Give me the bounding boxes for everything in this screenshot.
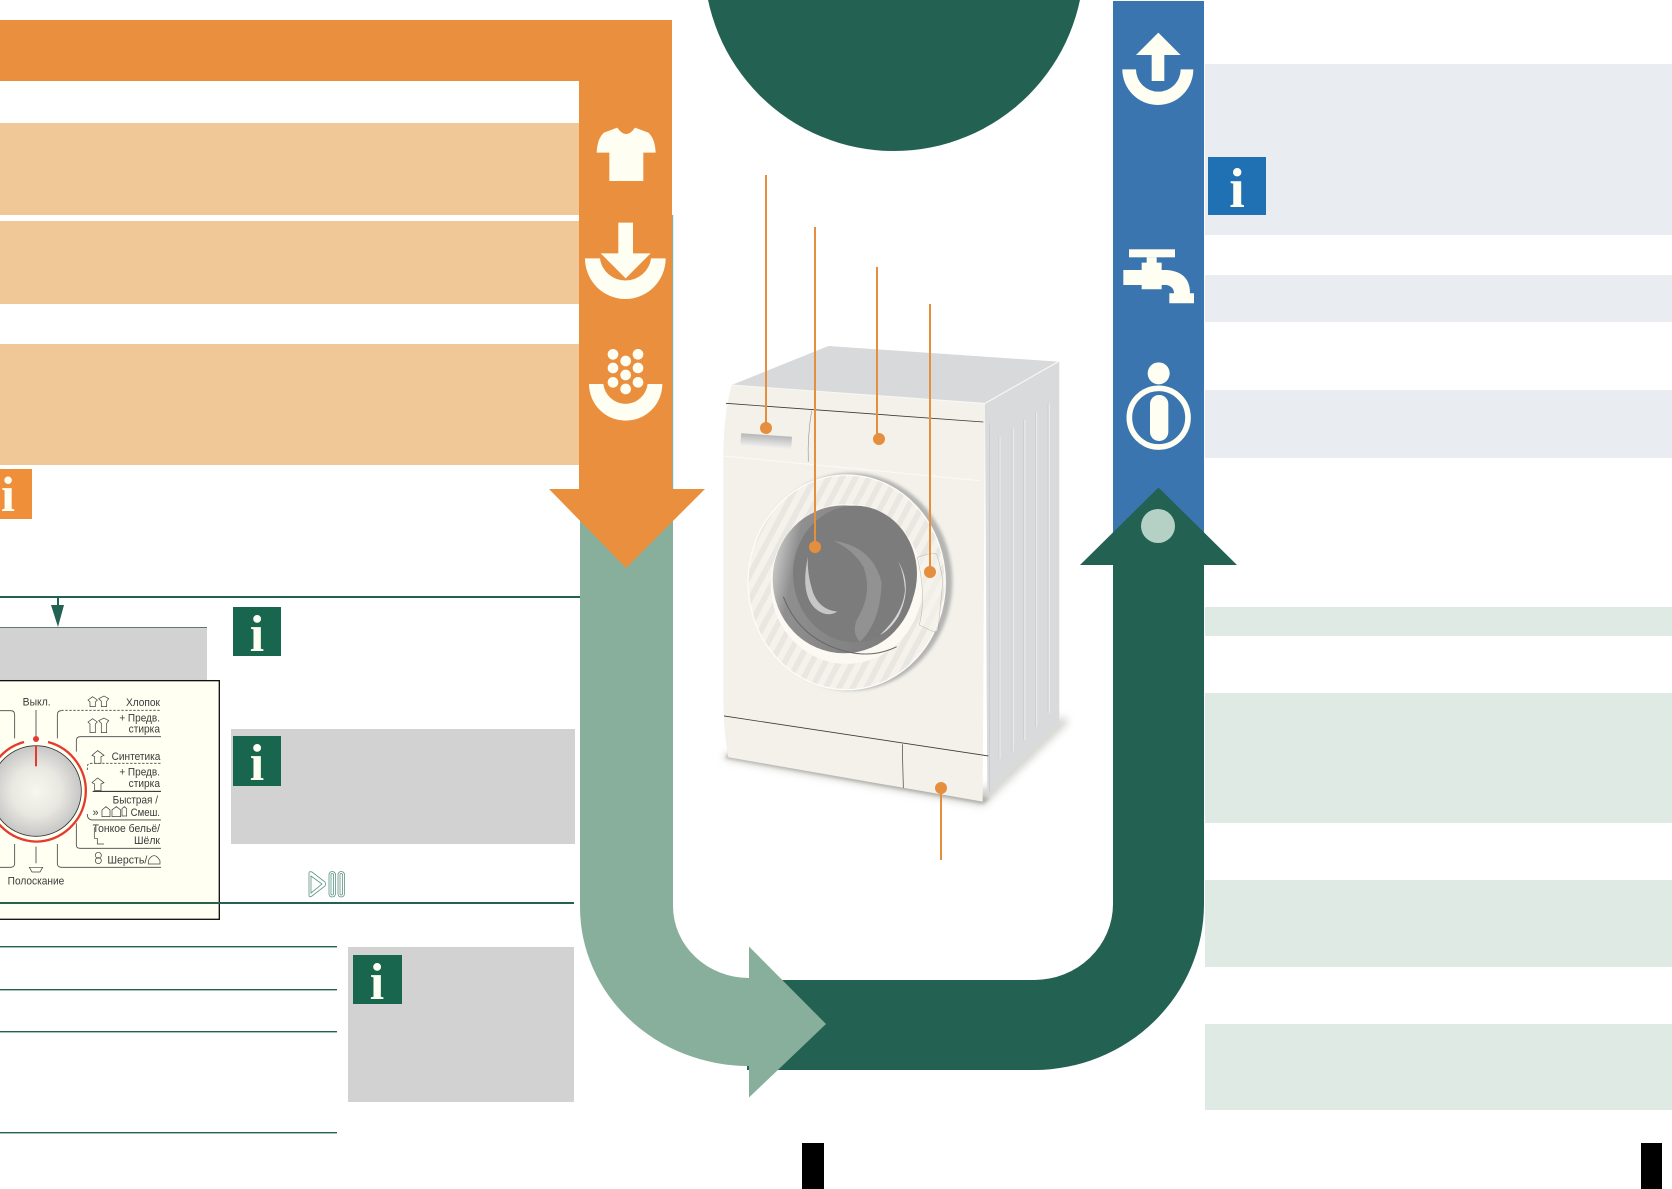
arrow: sage right arrowhead [749, 946, 826, 1098]
panel: control dial [0, 681, 219, 919]
panel: control dial: стирка [129, 724, 161, 736]
icon: information person [1129, 362, 1188, 447]
panels: green steps [1205, 607, 1672, 1110]
panel: control dial: Смеш. [131, 807, 160, 819]
panel: control dial: Тонкое бельё/ [93, 823, 161, 835]
washing machine illustration [723, 346, 1068, 805]
icon: blue info box: i [1229, 158, 1245, 220]
panel: control dial: Шёлк [134, 835, 160, 847]
panel: control dial: Выкл. [23, 696, 51, 708]
flow: blue vertical band [1113, 1, 1204, 541]
table: rule lines [0, 946, 337, 1133]
icon: detergent dots in drum [589, 349, 662, 421]
panel: control dial: Полоскание [8, 875, 64, 887]
panel: control dial: Шерсть/ [107, 854, 148, 866]
panel: control dial: » [93, 807, 99, 819]
icon: green info box [233, 606, 281, 663]
arrow: dark green up arrowhead [1080, 488, 1237, 565]
panels: orange step backgrounds [0, 123, 580, 465]
panel: control dial: Хлопок [126, 697, 160, 709]
icon: green info box: i [250, 606, 264, 663]
flow: sage green curved band [580, 215, 749, 1066]
panel: control dial: Быстрая / [113, 794, 159, 806]
panel: control dial: + Предв. [119, 712, 160, 724]
icon: load arrow into drum [585, 223, 666, 299]
icon: water tap [1123, 249, 1194, 303]
panels: blue steps [1205, 64, 1672, 458]
panel: control dial: Синтетика [112, 751, 161, 763]
flow: orange top band and arrow [0, 20, 705, 568]
section: programme selection rules [0, 596, 580, 627]
flow: dark green curved band [747, 540, 1204, 1070]
icon: t-shirt [597, 128, 656, 181]
callout: grey note with info icon: i [250, 735, 264, 792]
callout: lower grey note with info icon [348, 947, 574, 1102]
icon: unload arrow from drum [1122, 33, 1193, 105]
icon: start pause button [309, 872, 344, 897]
callout lines: machine part markers [760, 175, 947, 860]
rule: dial section bottom [0, 902, 574, 904]
panel: control dial: + Предв. [119, 766, 160, 778]
callout: lower grey note with info icon: i [370, 954, 384, 1011]
icon: orange info box: i [1, 466, 15, 522]
page tabs: black markers [802, 1143, 1662, 1189]
panel: grey note above dial [0, 627, 207, 681]
callout: grey note with info icon [231, 729, 575, 844]
panel: control dial: стирка [129, 778, 161, 790]
icon: blue info box [1208, 157, 1266, 220]
circle: dark green top badge [704, 0, 1084, 151]
icon: orange info box [0, 466, 32, 522]
